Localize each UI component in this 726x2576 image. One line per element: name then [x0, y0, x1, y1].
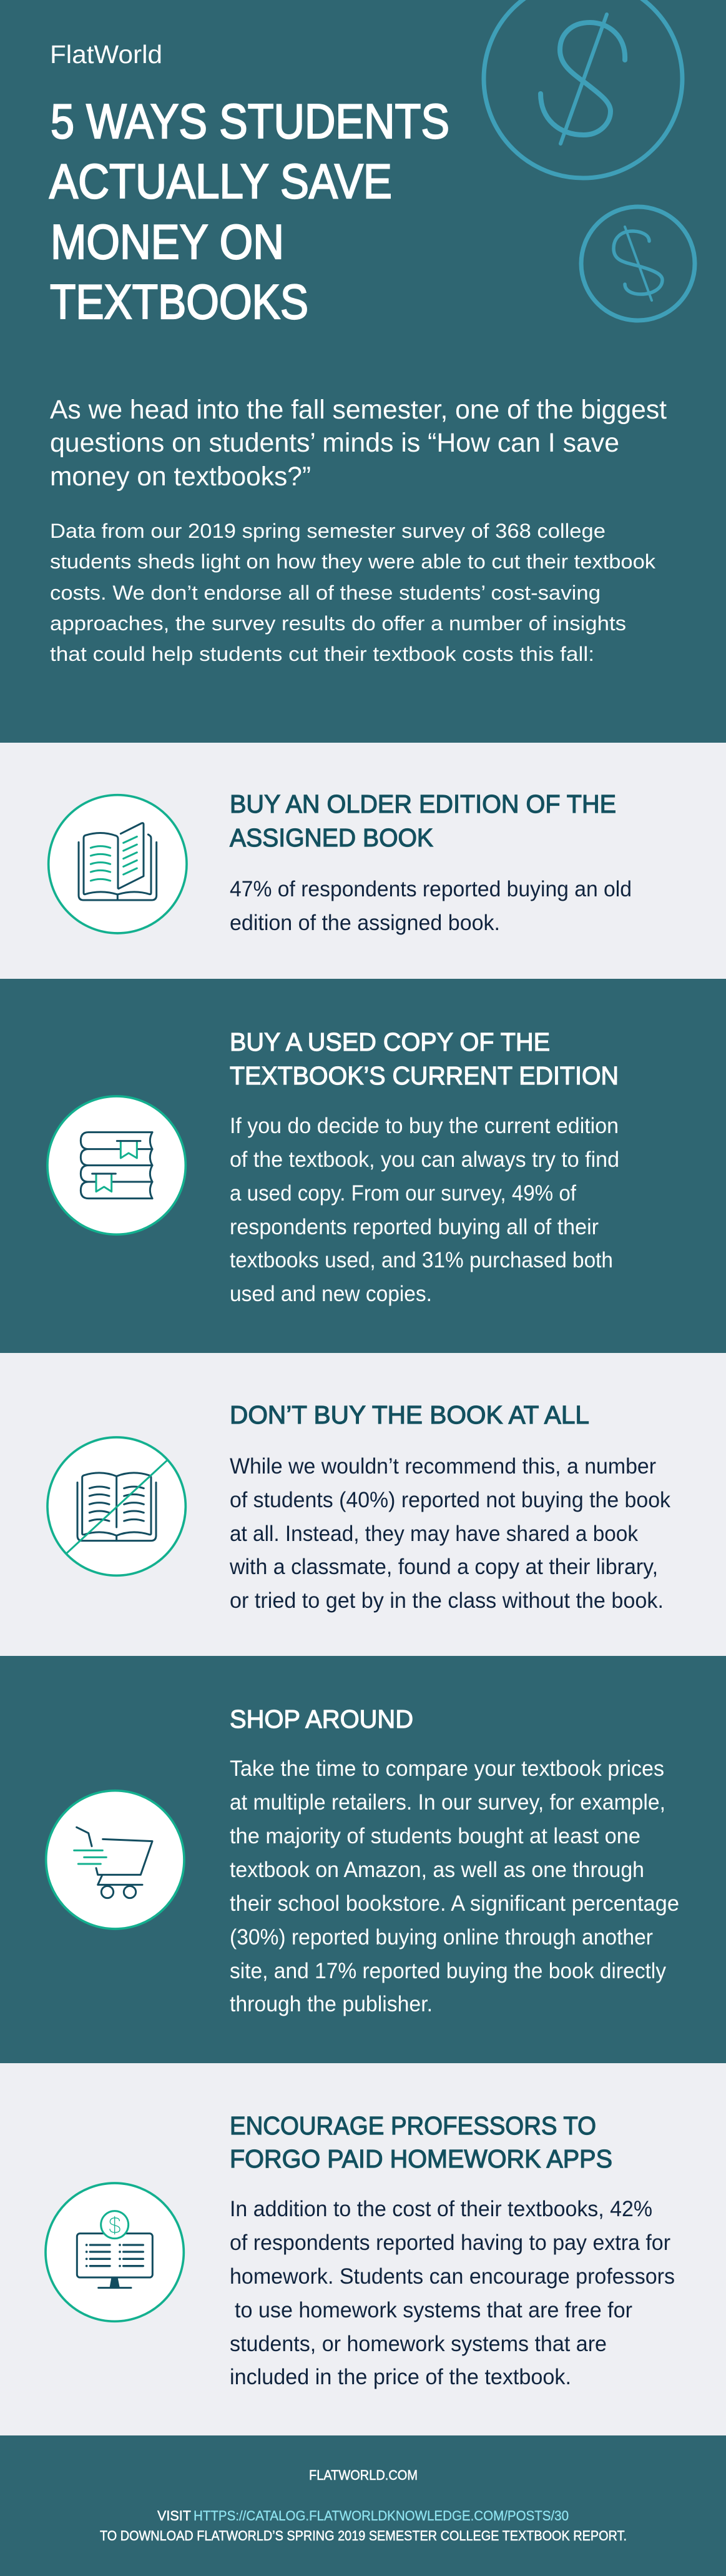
- brand name: FlatWorld: [50, 40, 162, 69]
- heading: ASSIGNED BOOK: [230, 823, 433, 852]
- heading: [230, 1028, 619, 1090]
- body text: [230, 1114, 619, 1306]
- icon: small dollar coin: [581, 207, 695, 320]
- heading: FORGO PAID HOMEWORK APPS: [230, 2144, 612, 2173]
- body text: through the publisher.: [230, 1992, 433, 2016]
- heading: DON’T BUY THE BOOK AT ALL: [230, 1400, 589, 1429]
- body text: [229, 1454, 670, 1613]
- body text: of the textbook, you can always try to find: [230, 1147, 619, 1172]
- panel: footer: [0, 2435, 726, 2576]
- body text: [230, 2197, 675, 2389]
- website: FLATWORLD.COM: [309, 2467, 418, 2483]
- title: 5 WAYS STUDENTS: [51, 94, 449, 149]
- heading: BUY A USED COPY OF THE: [230, 1028, 550, 1056]
- body text: with a classmate, found a copy at their library,: [229, 1555, 658, 1579]
- body text: [230, 877, 632, 935]
- body text: 47% of respondents reported buying an old: [230, 877, 632, 901]
- body text: Take the time to compare your textbook prices: [230, 1756, 664, 1781]
- body text: a used copy. From our survey, 49% of: [230, 1181, 576, 1206]
- body text: used and new copies.: [230, 1282, 432, 1306]
- body text: edition of the assigned book.: [230, 911, 500, 935]
- body text: of respondents reported having to pay extra for: [230, 2231, 670, 2255]
- icon: open book with turning page: [49, 795, 187, 933]
- lead paragraph: money on textbooks?”: [50, 462, 311, 492]
- body text: at all. Instead, they may have shared a book: [230, 1522, 638, 1546]
- body text: In addition to the cost of their textbooks, 42%: [230, 2197, 652, 2221]
- heading: [230, 790, 616, 852]
- body text: included in the price of the textbook.: [230, 2365, 571, 2389]
- icon: large dollar coin: [484, 0, 682, 178]
- intro paragraph: costs. We don’t endorse all of these students’ cost-saving: [50, 582, 601, 604]
- icon: stacked books with bookmarks: [47, 1096, 185, 1234]
- heading: TEXTBOOK’S CURRENT EDITION: [230, 1061, 619, 1090]
- body text: respondents reported buying all of their: [230, 1215, 599, 1239]
- visit line: HTTPS://CATALOG.FLATWORLDKNOWLEDGE.COM/POSTS/30: [194, 2508, 569, 2524]
- title: ACTUALLY SAVE: [49, 154, 392, 209]
- intro paragraph: approaches, the survey results do offer a number of insights: [50, 612, 626, 635]
- intro paragraph: Data from our 2019 spring semester survey of 368 college: [50, 520, 606, 542]
- panel: don't buy the book: [0, 1353, 726, 1656]
- panel: encourage professors: [0, 2063, 726, 2435]
- body text: textbook on Amazon, as well as one through: [230, 1858, 644, 1882]
- lead paragraph: questions on students’ minds is “How can I save: [50, 428, 619, 458]
- intro paragraph: that could help students cut their textbook costs this fall:: [50, 643, 594, 665]
- body text: If you do decide to buy the current edition: [230, 1114, 619, 1138]
- body text: the majority of students bought at least one: [230, 1824, 640, 1848]
- body text: textbooks used, and 31% purchased both: [230, 1248, 613, 1272]
- lead paragraph: As we head into the fall semester, one of the biggest: [50, 395, 667, 425]
- panel: header: [0, 0, 726, 743]
- icon: crossed-out book: [47, 1437, 185, 1575]
- title: TEXTBOOKS: [50, 274, 308, 329]
- body text: to use homework systems that are free for: [235, 2298, 632, 2322]
- panel: shop around: [0, 1656, 726, 2063]
- body text: of students (40%) reported not buying the book: [230, 1488, 670, 1512]
- heading: BUY AN OLDER EDITION OF THE: [230, 790, 616, 818]
- body text: (30%) reported buying online through another: [230, 1925, 653, 1949]
- heading: SHOP AROUND: [230, 1705, 413, 1733]
- download line: TO DOWNLOAD FLATWORLD’S SPRING 2019 SEMESTER COLLEGE TEXTBOOK REPORT.: [100, 2528, 627, 2544]
- body text: While we wouldn’t recommend this, a number: [230, 1454, 656, 1479]
- body text: students, or homework systems that are: [230, 2332, 607, 2356]
- intro paragraph: [50, 520, 656, 665]
- body text: their school bookstore. A significant percentage: [230, 1891, 679, 1916]
- title: [49, 94, 449, 329]
- body text: [230, 1756, 679, 2016]
- intro paragraph: students sheds light on how they were able to cut their textbook: [50, 550, 656, 573]
- title: MONEY ON: [51, 214, 284, 269]
- body text: at multiple retailers. In our survey, for example,: [230, 1790, 665, 1815]
- body text: site, and 17% reported buying the book directly: [230, 1959, 666, 1983]
- lead paragraph: [50, 395, 667, 492]
- heading: ENCOURAGE PROFESSORS TO: [230, 2111, 596, 2140]
- heading: [230, 2111, 612, 2173]
- body text: or tried to get by in the class without the book.: [230, 1588, 664, 1613]
- icon: shopping cart: [46, 1791, 184, 1929]
- panel: buy a used copy: [0, 979, 726, 1353]
- visit line: VISIT: [157, 2508, 191, 2524]
- panel: buy an older edition: [0, 743, 726, 979]
- icon: monitor with dollar badge: [46, 2183, 184, 2321]
- body text: homework. Students can encourage professors: [230, 2264, 675, 2289]
